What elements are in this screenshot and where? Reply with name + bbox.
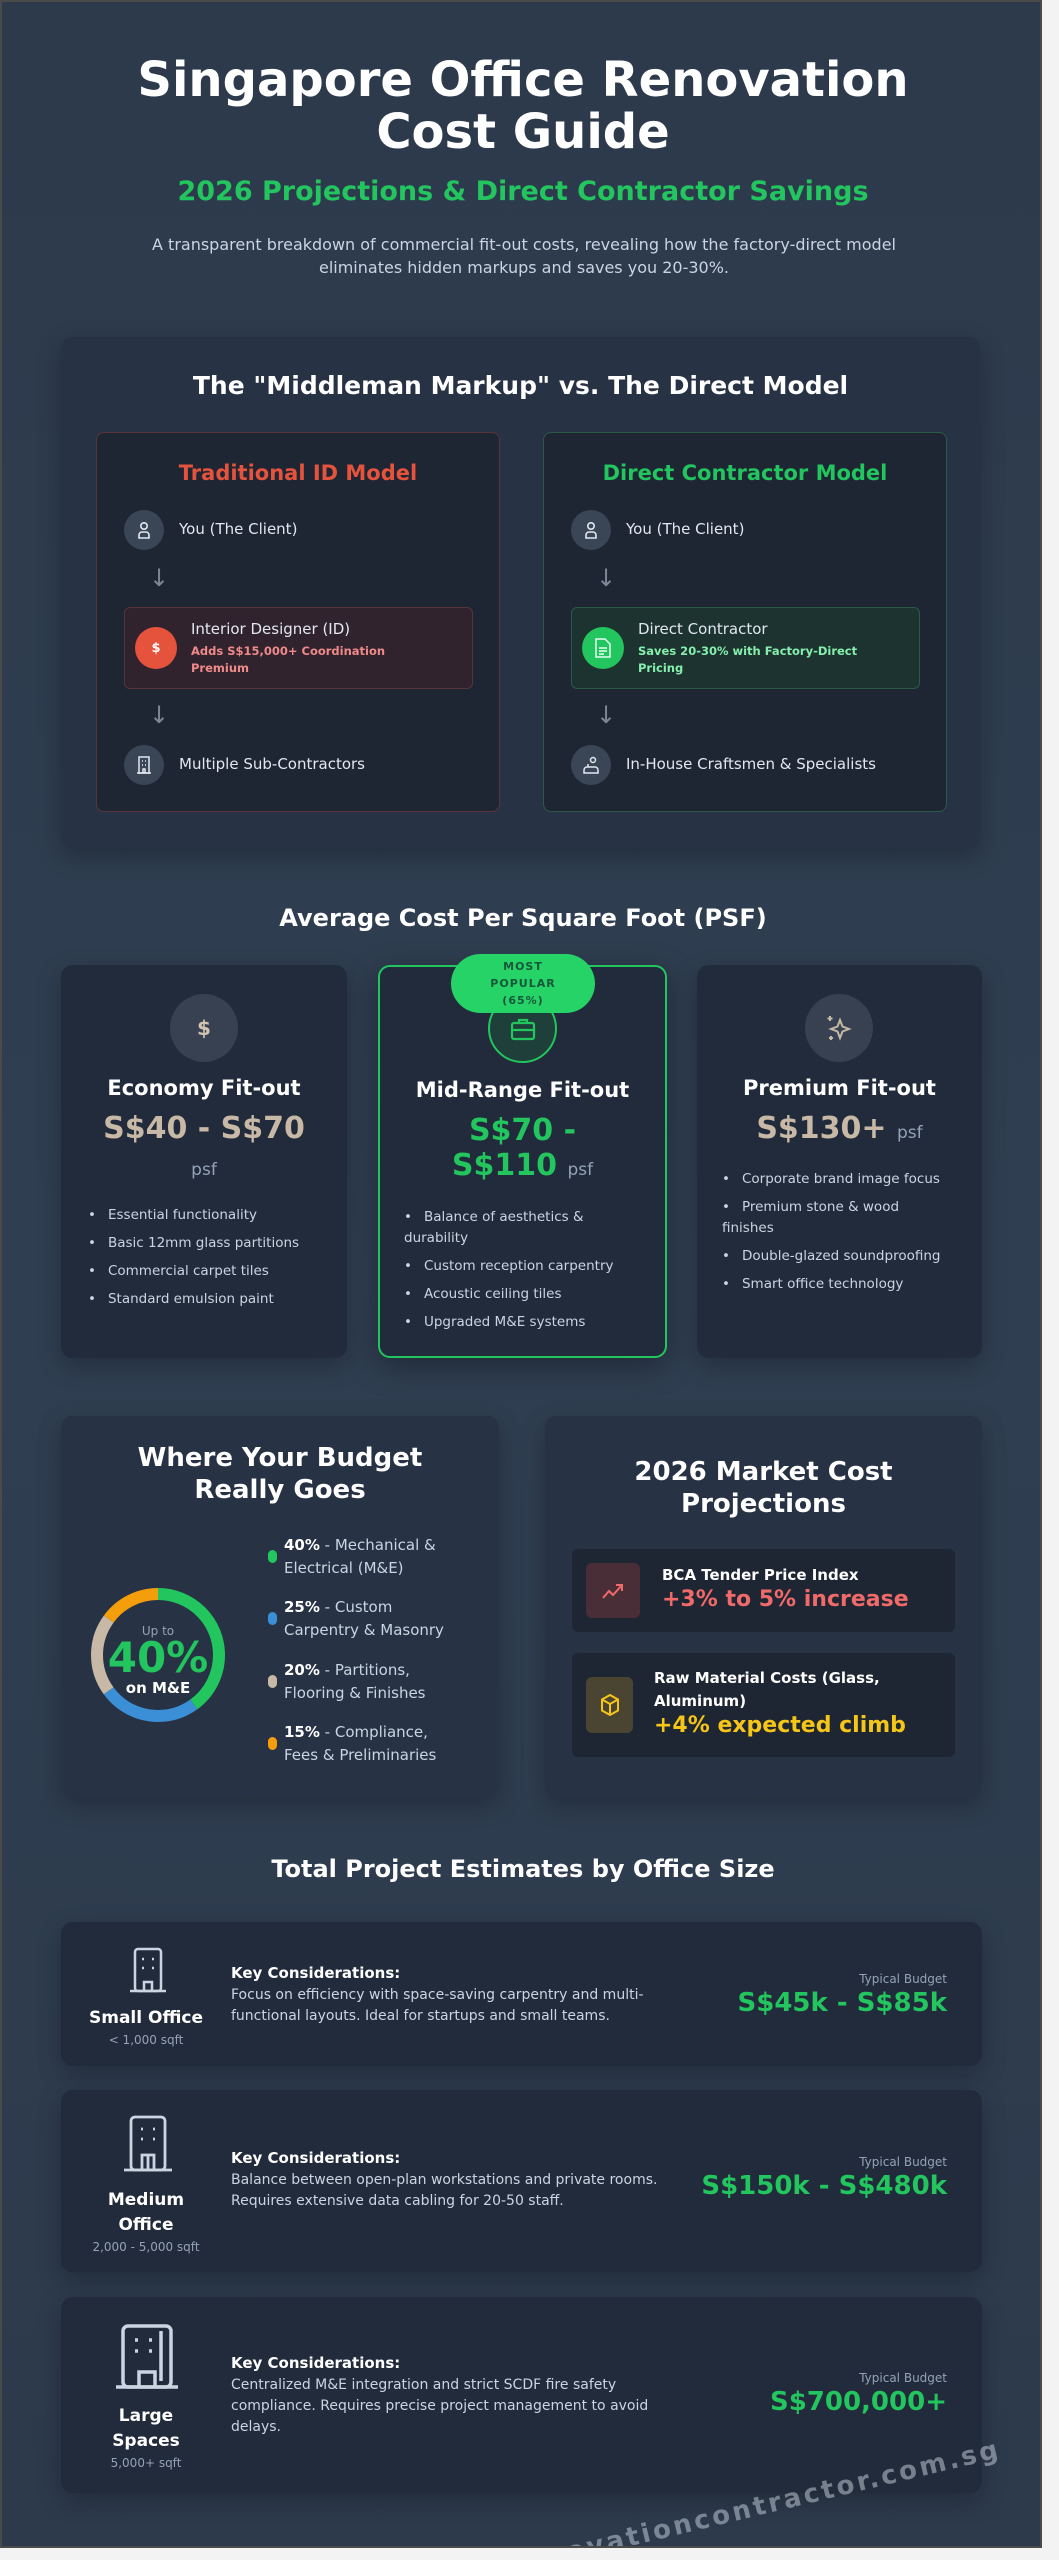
- price mid: S$110 psf: [452, 1148, 593, 1183]
- subtitle: 2026 Projections & Direct Contractor Savings: [177, 176, 869, 207]
- icon: craftsmen: [571, 745, 611, 785]
- list premium: Smart office technology: [742, 1276, 903, 1292]
- box: interior designer: Interior Designer (ID): [191, 620, 350, 638]
- list economy: Basic 12mm glass partitions: [108, 1235, 299, 1251]
- box: raw material: [572, 1653, 955, 1757]
- card: economy: psf: [191, 1160, 217, 1180]
- heading: project estimates: Total Project Estimates by Office Size: [271, 1855, 775, 1883]
- row: medium office: Medium: [108, 2190, 184, 2210]
- panel: market projections: [545, 1416, 982, 1797]
- panel: direct model: In-House Craftsmen & Specialists: [626, 755, 876, 773]
- arrow: ↓: [596, 701, 616, 729]
- arrow: ↓: [596, 564, 616, 592]
- budget small: Typical Budget: [859, 1972, 947, 1986]
- heading direct: Direct Contractor Model: [603, 461, 887, 485]
- list economy: Standard emulsion paint: [108, 1291, 274, 1307]
- box: interior designer: Adds S$15,000+ Coordination Premium: [191, 644, 385, 675]
- price premium: S$130+ psf: [756, 1111, 923, 1146]
- panel: market projections: 2026 Market Cost: [634, 1457, 893, 1487]
- box: direct contractor: Saves 20-30% with Factory-Direct Pricing: [638, 644, 857, 675]
- budget small: [738, 1972, 948, 2018]
- panel: direct model: You (The Client): [626, 520, 744, 538]
- budget small: S$45k - S$85k: [738, 1988, 947, 2018]
- heading traditional: Traditional ID Model: [179, 461, 417, 485]
- box: BCA index: [572, 1549, 955, 1632]
- row: small office: Focus on efficiency with space-saving carpentry and multi-functional layouts. Ideal for startups and small teams.: [231, 1987, 644, 2024]
- arrow: ↓: [149, 701, 169, 729]
- badge: most popular: [451, 954, 595, 1013]
- panel: traditional model: Multiple Sub-Contractors: [179, 755, 365, 773]
- row: large spaces: 5,000+ sqft: [111, 2456, 181, 2470]
- heading: psf: Average Cost Per Square Foot (PSF): [279, 904, 767, 932]
- row: small office: [61, 1922, 982, 2066]
- icon: medium building: [124, 2116, 172, 2172]
- row: medium office: Key Considerations:: [231, 2149, 400, 2167]
- row: large spaces: Key Considerations:: [231, 2354, 400, 2372]
- icon: dollar red: [135, 627, 177, 669]
- panel: middleman vs direct: [61, 337, 980, 848]
- arrow: ↓: [149, 564, 169, 592]
- list economy: Commercial carpet tiles: [108, 1263, 269, 1279]
- card: economy: [61, 965, 347, 1358]
- list premium: Double-glazed soundproofing: [742, 1248, 940, 1264]
- row: large spaces: Centralized M&E integration and strict SCDF fire safety compliance. Requires precise project management to avoid delays.: [231, 2377, 648, 2435]
- list mid: Acoustic ceiling tiles: [424, 1286, 562, 1302]
- list mid: Upgraded M&E systems: [424, 1314, 585, 1330]
- icon: briefcase: [488, 994, 557, 1063]
- panel: budget breakdown: 20% - Partitions, Flooring & Finishes: [284, 1661, 426, 1702]
- title: Cost Guide: [376, 104, 670, 160]
- list premium: [722, 1171, 940, 1292]
- donut chart: [91, 1588, 225, 1722]
- row: large spaces: [61, 2297, 982, 2493]
- box: interior designer: [124, 607, 473, 689]
- donut chart: on M&E: [126, 1679, 190, 1697]
- row: large spaces: Spaces: [112, 2431, 180, 2451]
- donut chart: Up to: [142, 1624, 174, 1638]
- list premium: finishes: [722, 1220, 774, 1236]
- list economy: [90, 1207, 299, 1307]
- card: mid-range: [378, 965, 667, 1358]
- row: small office: < 1,000 sqft: [109, 2033, 183, 2047]
- list mid: Custom reception carpentry: [424, 1258, 614, 1274]
- list premium: Corporate brand image focus: [742, 1171, 940, 1187]
- card: mid-range: Mid-Range Fit-out: [416, 1078, 629, 1102]
- panel: direct model: [543, 432, 947, 812]
- panel: budget breakdown: 25% - Custom Carpentry & Masonry: [284, 1598, 444, 1639]
- row: medium office: 2,000 - 5,000 sqft: [92, 2240, 200, 2254]
- list economy: Essential functionality: [108, 1207, 257, 1223]
- price mid: [452, 1113, 594, 1183]
- row: large spaces: Large: [119, 2406, 173, 2426]
- row: medium office: Balance between open-plan workstations and private rooms. Requires extensive data cabling for 20-50 staff.: [231, 2172, 657, 2209]
- row: medium office: [61, 2090, 982, 2272]
- budget large: [770, 2371, 947, 2417]
- legend: 40% - Mechanical & Electrical (M&E): [284, 1536, 436, 1577]
- row: medium office: Office: [118, 2215, 174, 2235]
- panel: budget breakdown: Where Your Budget: [138, 1443, 422, 1473]
- icon: client: [124, 510, 164, 550]
- panel: budget breakdown: Really Goes: [194, 1475, 366, 1505]
- label client: You (The Client): [179, 520, 297, 538]
- panel: traditional model: [96, 432, 500, 812]
- icon: cube: [586, 1677, 633, 1733]
- box: BCA index: +3% to 5% increase: [662, 1587, 909, 1612]
- row: small office: Key Considerations:: [231, 1964, 400, 1982]
- icon: dollar red: $: [151, 640, 161, 656]
- price economy: S$40 - S$70: [103, 1111, 305, 1146]
- box: direct contractor: [571, 607, 920, 689]
- icon: trend up: [586, 1563, 640, 1618]
- price mid: S$70 -: [469, 1113, 576, 1148]
- budget large: Typical Budget: [859, 2371, 947, 2385]
- panel: market projections: Projections: [681, 1489, 846, 1519]
- badge: most popular: (65%): [502, 994, 544, 1007]
- card: premium: Premium Fit-out: [743, 1076, 936, 1100]
- title: [137, 52, 909, 160]
- icon: client: [571, 510, 611, 550]
- list mid: Balance of aesthetics & durability: [404, 1209, 584, 1246]
- icon: small building: [130, 1948, 166, 1992]
- budget medium: S$150k - S$480k: [701, 2171, 947, 2201]
- donut chart: 40%: [108, 1633, 208, 1682]
- card: premium: [697, 965, 982, 1358]
- box: raw material: Raw Material Costs (Glass, Aluminum): [654, 1669, 880, 1710]
- icon: building: [124, 745, 164, 785]
- card: economy: Economy Fit-out: [107, 1076, 301, 1100]
- panel: budget breakdown: [61, 1416, 499, 1797]
- icon: document green: [582, 627, 624, 669]
- title: Singapore Office Renovation: [137, 52, 909, 108]
- badge: most popular: POPULAR: [490, 977, 556, 990]
- budget large: S$700,000+: [770, 2387, 947, 2417]
- icon: dollar: $: [197, 1016, 211, 1040]
- panel: budget breakdown: 15% - Compliance, Fees & Preliminaries: [284, 1723, 436, 1764]
- icon: sparkle: [805, 994, 873, 1062]
- intro text: A transparent breakdown of commercial fit-out costs, revealing how the factory-direct model eliminates hidden markups and saves you 20-30%.: [152, 235, 896, 277]
- badge: most popular: MOST: [503, 960, 543, 973]
- list premium: Premium stone & wood: [742, 1199, 899, 1215]
- panel heading: The "Middleman Markup" vs. The Direct Model: [193, 371, 848, 400]
- icon: large building: [116, 2324, 178, 2389]
- budget medium: Typical Budget: [859, 2155, 947, 2169]
- budget medium: [701, 2155, 948, 2201]
- box: direct contractor: Direct Contractor: [638, 620, 768, 638]
- icon: dollar: [170, 994, 238, 1062]
- list mid: [404, 1209, 614, 1330]
- row: small office: Small Office: [89, 2008, 203, 2028]
- box: BCA index: BCA Tender Price Index: [662, 1566, 859, 1584]
- box: raw material: +4% expected climb: [654, 1713, 906, 1738]
